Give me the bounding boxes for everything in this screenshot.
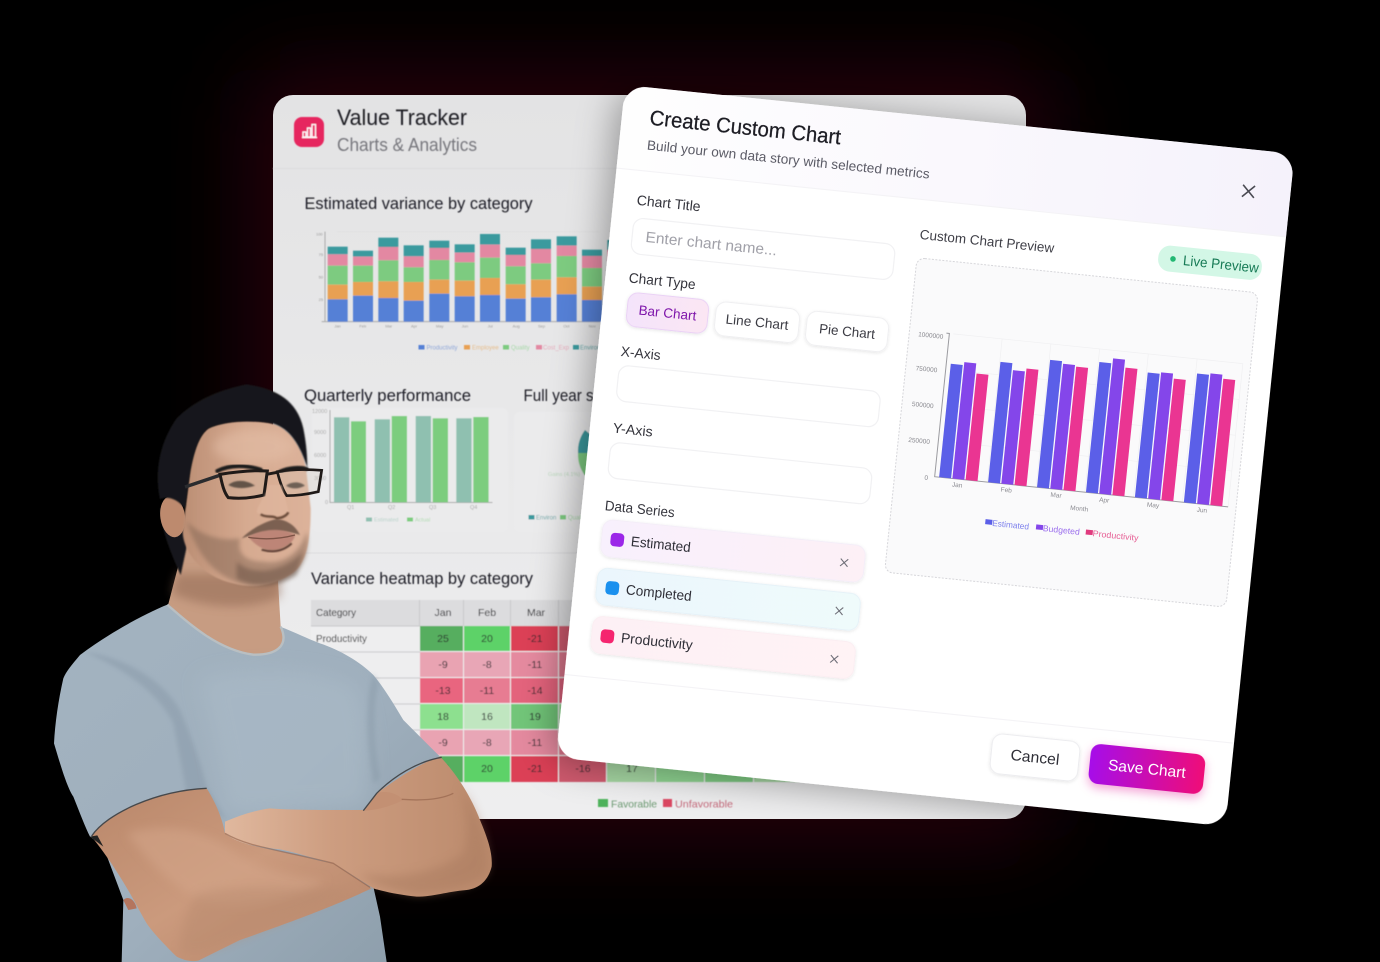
table: variance heatmap: 20: [481, 633, 493, 645]
series: completed: Completed: [625, 581, 693, 604]
button: cancel: [989, 733, 1081, 782]
field: x-axis: [616, 343, 883, 428]
icon: close: [1242, 185, 1255, 198]
table: variance heatmap: -13: [435, 685, 451, 697]
bar chart: quarterly: 9000: [314, 430, 326, 436]
pie chart: full year: Quality: [568, 516, 587, 522]
beard stubble: [187, 522, 308, 586]
sleeve seam shading: [83, 652, 227, 820]
grouped bar chart: 250000: [908, 437, 931, 446]
button: save chart: Save Chart: [1107, 757, 1187, 782]
table: variance heatmap: -16: [575, 763, 591, 775]
heading: Full year: Full year summary: [524, 386, 649, 405]
field: chart title: [630, 192, 898, 280]
grouped bar chart: Apr: [1099, 497, 1110, 505]
stacked bar chart: Feb: [359, 323, 367, 328]
arm: right arm shadow: [360, 787, 488, 895]
eyes: [228, 481, 305, 488]
sleeve hem corner: [90, 835, 103, 847]
stacked bar chart: [316, 231, 627, 328]
table: variance heatmap: Category: [316, 607, 357, 619]
legend: stacked bar chart: [418, 345, 600, 352]
stacked bar chart: Sep: [538, 323, 546, 328]
table: variance heatmap: -21: [527, 633, 543, 645]
legend: stacked bar chart: Employee: [472, 346, 499, 352]
bar chart: quarterly: 12000: [312, 409, 327, 415]
table: variance heatmap: -11: [480, 685, 494, 697]
arm: right arm: [225, 757, 492, 897]
table: variance heatmap: -9: [438, 737, 448, 749]
table: variance heatmap: 16: [481, 711, 493, 723]
ear: [158, 494, 188, 539]
heading: Quarterly performance: Quarterly performance: [304, 386, 471, 405]
table: variance heatmap: -11: [528, 737, 542, 749]
bar chart: quarterly: 6000: [314, 453, 326, 459]
series: productivity: Productivity: [620, 630, 694, 653]
legend: preview chart: [985, 517, 1140, 543]
arm crease: [225, 793, 453, 887]
table: variance heatmap: 25: [437, 763, 449, 775]
grouped bar chart: Mar: [1050, 492, 1063, 500]
forehead light: [213, 430, 293, 463]
panel: create custom chart modal: [556, 85, 1295, 826]
badge: live preview: [1157, 245, 1263, 281]
nose: [257, 485, 288, 517]
button: cancel: Cancel: [1010, 747, 1060, 769]
field: chart title: Chart Title: [636, 192, 702, 214]
legend: stacked bar chart: Productivity: [426, 346, 458, 352]
bar chart: quarterly: [312, 408, 508, 532]
arm: left arm highlight: [127, 828, 327, 905]
legend: stacked bar chart: Environ: [580, 346, 600, 352]
heading: data series: Data Series: [604, 497, 675, 520]
grouped bar chart: Feb: [1000, 487, 1013, 495]
pie chart: full year: [514, 412, 634, 532]
right sleeve seam shading: [367, 673, 380, 783]
arm: left arm: [92, 788, 372, 961]
field: x-axis: X-Axis: [620, 343, 661, 363]
background glow: [250, 70, 1050, 840]
heading: Value Tracker: Value Tracker: [337, 105, 467, 130]
person with crossed arms: [54, 384, 492, 962]
table: variance heatmap: 19: [529, 711, 541, 723]
lower lip shadow: [262, 543, 292, 551]
table: variance heatmap: 25: [437, 633, 449, 645]
series: completed: [595, 567, 861, 631]
lips: [248, 530, 295, 550]
field: y-axis: [607, 420, 875, 505]
hair: [158, 384, 307, 508]
grouped bar chart: 500000: [912, 401, 934, 410]
bar chart: quarterly: Estimated: [374, 518, 398, 524]
series: estimated: Estimated: [630, 533, 692, 555]
button: bar chart: [625, 292, 710, 334]
stacked bar chart: Jan: [334, 323, 341, 328]
grouped bar chart: 750000: [915, 365, 938, 374]
stacked bar chart: May: [436, 323, 444, 328]
panel: value tracker dashboard: [273, 95, 1026, 819]
stacked bar chart: 75: [319, 252, 324, 257]
grouped bar chart: 1000000: [918, 331, 944, 341]
stacked bar chart: Mar: [385, 323, 393, 328]
subtitle: Build your own data story with selected metrics: [646, 138, 931, 182]
button: save chart: [1088, 743, 1206, 795]
legend: heatmap: Favorable: [611, 798, 657, 810]
table: variance heatmap: Jan: [435, 607, 452, 619]
legend: stacked bar chart: Quality: [511, 346, 530, 352]
stacked bar chart: Jul: [488, 323, 493, 328]
table: variance heatmap: Mar: [527, 607, 546, 619]
button: line chart: [714, 301, 801, 343]
bar chart: quarterly: Q4: [470, 505, 477, 511]
table: variance heatmap: 20: [481, 763, 493, 775]
grouped bar chart: May: [1147, 502, 1160, 510]
table: variance heatmap: -21: [527, 763, 543, 775]
grouped bar chart: Jan: [952, 482, 963, 490]
table: variance heatmap: Productivity: [316, 633, 368, 645]
panel: chart preview box: [885, 258, 1258, 607]
table: variance heatmap: -14: [527, 685, 543, 697]
stacked bar chart: Apr: [411, 323, 418, 328]
stacked bar chart: 25: [319, 297, 324, 302]
table: variance heatmap: -11: [528, 659, 542, 671]
heading: Variance heatmap: Variance heatmap by category: [311, 569, 533, 588]
legend: preview chart: Estimated: [992, 518, 1030, 532]
face: [183, 421, 311, 586]
body: [54, 540, 492, 962]
table: variance heatmap: Apr: [575, 607, 592, 619]
table: variance heatmap: -8: [482, 737, 492, 749]
left sleeve hem: [92, 788, 207, 836]
field: chart type: [624, 269, 892, 353]
legend: heatmap: Unfavorable: [675, 798, 733, 810]
badge: live preview: Live Preview: [1182, 252, 1260, 276]
arm: left arm shadow: [180, 888, 350, 953]
mustache: [242, 519, 300, 538]
stacked bar chart: Oct: [563, 323, 570, 328]
neck: [168, 540, 283, 655]
button: bar chart: Bar Chart: [638, 303, 697, 323]
grouped bar chart: 0: [924, 475, 929, 482]
icon: bar chart badge: [294, 117, 324, 147]
field: chart type: Chart Type: [628, 269, 697, 292]
pie chart: full year: Environ: [536, 516, 556, 522]
button: line chart: Line Chart: [725, 312, 789, 333]
bar chart: quarterly: 0: [325, 500, 328, 506]
head: [158, 384, 322, 586]
bar chart: quarterly: Q1: [347, 505, 354, 511]
legend: heatmap: [598, 798, 733, 810]
grouped bar chart: [902, 330, 1243, 528]
fingers: [123, 898, 137, 910]
stacked bar chart: Aug: [513, 323, 520, 328]
glasses: [185, 470, 322, 498]
button: pie chart: [805, 310, 890, 353]
data series list: [590, 497, 868, 679]
stacked bar chart: Jun: [462, 323, 468, 328]
modal header: [617, 85, 1295, 237]
hand over sleeve: [365, 792, 403, 811]
heading: custom chart preview: Custom Chart Preview: [919, 227, 1055, 256]
stacked bar chart: 50: [319, 274, 324, 279]
heading: Create Custom Chart: Create Custom Chart: [649, 107, 842, 149]
series: estimated: [600, 519, 866, 583]
button: pie chart: Pie Chart: [818, 321, 876, 342]
table: variance heatmap: -8: [482, 659, 492, 671]
bar chart: quarterly: 3000: [314, 476, 326, 482]
stacked bar chart: Nov: [589, 323, 596, 328]
field: y-axis: Y-Axis: [612, 420, 654, 440]
table: variance heatmap: [311, 600, 811, 782]
hair behind ear: [160, 502, 190, 575]
t-shirt: [54, 605, 440, 962]
neck shadow: [172, 573, 281, 606]
bar chart: quarterly: Q3: [429, 505, 436, 511]
grouped bar chart: Jun: [1196, 507, 1208, 515]
chin stubble: [237, 552, 303, 585]
eyebrows: [217, 466, 307, 472]
lip line: [248, 535, 295, 539]
right sleeve hem: [363, 757, 442, 811]
subheading: Charts & Analytics: Charts & Analytics: [337, 135, 477, 155]
field: chart title: Enter chart name...: [645, 229, 778, 259]
shirt collar: [167, 605, 283, 655]
legend: preview chart: Productivity: [1092, 528, 1140, 543]
heading: Estimated variance by category: Estimated variance by category: [304, 194, 533, 213]
table: variance heatmap: Feb: [478, 607, 496, 619]
bar chart: quarterly: Q2: [388, 505, 395, 511]
table: variance heatmap: 18: [437, 711, 449, 723]
legend: preview chart: Budgeted: [1042, 523, 1081, 537]
series: productivity: [590, 616, 856, 679]
torso light: [200, 671, 369, 813]
table: variance heatmap: 17: [626, 763, 638, 775]
table: variance heatmap: -9: [438, 659, 448, 671]
bar chart: quarterly: Actual: [415, 518, 430, 524]
stacked bar chart: 100: [316, 231, 323, 236]
legend: stacked bar chart: Cost_Exp: [543, 346, 570, 352]
grouped bar chart: Month: [1070, 505, 1089, 514]
pie chart: full year: Gains (4.1%): [548, 472, 580, 478]
